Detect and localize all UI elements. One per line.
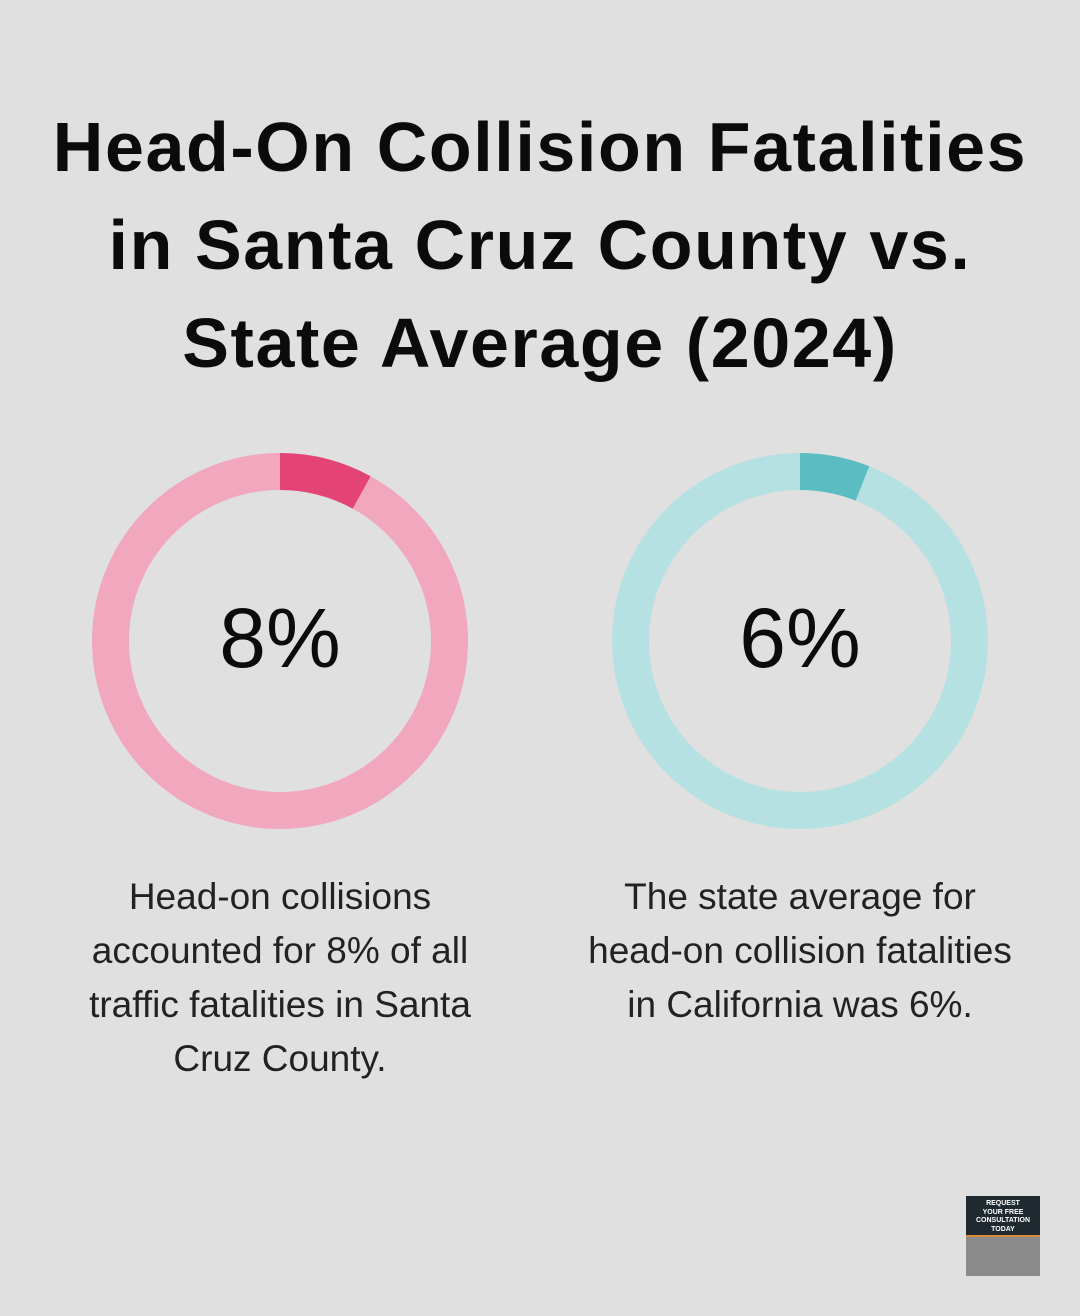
title bbox=[53, 108, 1027, 382]
text: state description: in California was 6%. bbox=[627, 984, 973, 1025]
logo: consultation badge: YOUR FREE bbox=[983, 1208, 1023, 1216]
donut: California 6% bbox=[612, 453, 988, 829]
logo: consultation badge: TODAY bbox=[991, 1226, 1015, 1232]
value: 6%: 6% bbox=[739, 591, 861, 685]
text: Santa Cruz description: Cruz County. bbox=[173, 1038, 387, 1079]
donut: Santa Cruz 8% bbox=[92, 453, 468, 829]
title: in Santa Cruz County vs. bbox=[109, 206, 971, 284]
text: state description bbox=[588, 876, 1012, 1025]
logo: consultation badge: REQUEST bbox=[986, 1200, 1020, 1207]
logo: consultation badge: CONSULTATION bbox=[976, 1217, 1030, 1224]
text: state description: The state average for bbox=[624, 876, 976, 917]
title: State Average (2024) bbox=[182, 304, 898, 382]
text: Santa Cruz description: Head-on collisions bbox=[129, 876, 431, 917]
title: Head-On Collision Fatalities bbox=[53, 108, 1027, 186]
logo: consultation badge bbox=[966, 1196, 1040, 1276]
text: Santa Cruz description bbox=[89, 876, 471, 1079]
text: Santa Cruz description: accounted for 8% of all bbox=[92, 930, 468, 971]
value: 8%: 8% bbox=[219, 591, 341, 685]
text: Santa Cruz description: traffic fatalities in Santa bbox=[89, 984, 471, 1025]
text: state description: head-on collision fatalities bbox=[588, 930, 1012, 971]
